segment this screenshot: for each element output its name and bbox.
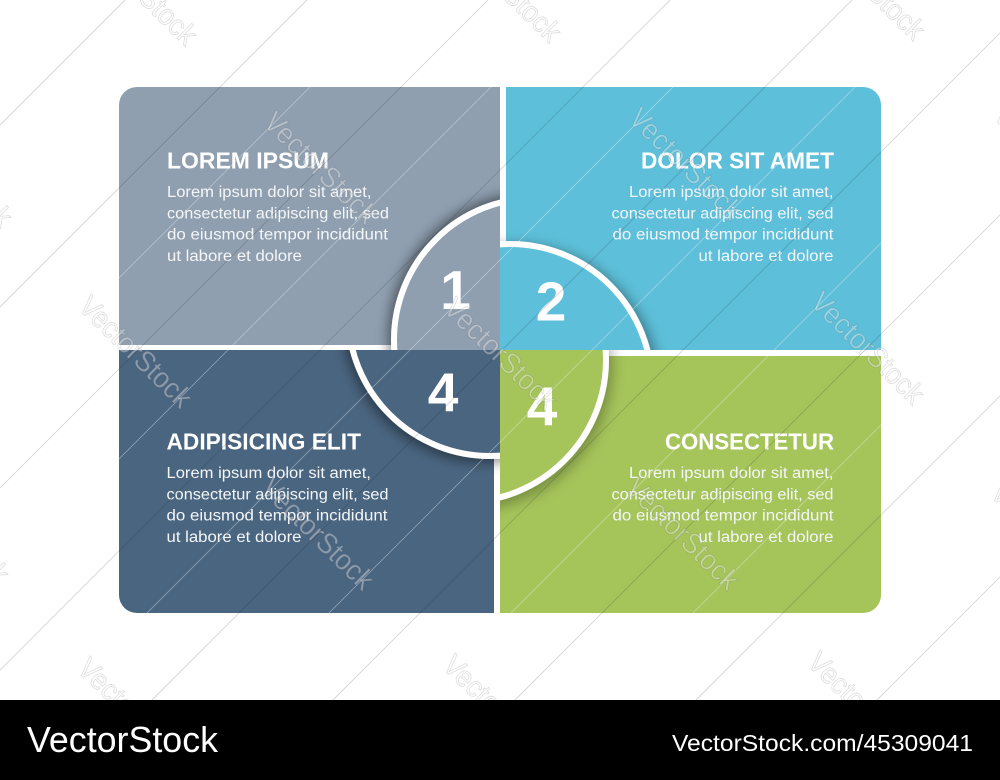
text block: adipisicing elit: ut labore et dolore <box>166 529 302 546</box>
footer bar <box>0 700 1000 780</box>
footer image id: VectorStock.com/45309041 <box>672 730 973 756</box>
text block: lorem ipsum <box>167 184 389 265</box>
text block: dolor sit amet <box>612 184 834 265</box>
footer logo text: VectorStock <box>27 719 219 760</box>
text block: adipisicing elit: Lorem ipsum dolor sit amet, <box>166 465 371 482</box>
heading: dolor sit amet: DOLOR SIT AMET <box>641 147 834 173</box>
number 4, left: 4 <box>428 361 459 423</box>
watermarks: VectorStock <box>254 472 380 597</box>
text block: consectetur: Lorem ipsum dolor sit amet, <box>629 465 834 482</box>
watermarks: VectorStock <box>804 286 930 411</box>
segment 1 arc <box>380 188 500 350</box>
text block: lorem ipsum: do eiusmod tempor incididunt <box>167 227 389 244</box>
heading: consectetur: CONSECTETUR <box>665 428 834 454</box>
panel: adipisicing elit (bottom left) <box>119 350 500 613</box>
text block: dolor sit amet: do eiusmod tempor incididunt <box>612 227 834 244</box>
segment 4 arc, right <box>500 350 619 513</box>
text block: lorem ipsum: consectetur adipiscing elit, sed <box>167 205 389 222</box>
watermarks: VectorStock <box>71 652 197 777</box>
watermarks: VectorStock <box>801 646 927 771</box>
heading: lorem ipsum: LOREM IPSUM <box>167 147 329 173</box>
watermarks: VectorStock <box>436 649 562 774</box>
panel: dolor sit amet (top right) <box>500 87 881 350</box>
watermarks: VectorStock <box>437 292 563 417</box>
text block: consectetur: ut labore et dolore <box>698 529 834 546</box>
segment 4 arc, left <box>340 350 500 471</box>
number 2: 2 <box>536 271 566 333</box>
watermarks: VectorStock <box>622 102 748 227</box>
number 1: 1 <box>440 259 471 321</box>
text block: consectetur <box>612 465 834 546</box>
panel: consectetur (bottom right) <box>500 350 881 613</box>
text block: lorem ipsum: ut labore et dolore <box>167 248 302 265</box>
text block: consectetur: do eiusmod tempor incididunt <box>612 508 834 525</box>
watermarks: VectorStock <box>257 106 383 231</box>
heading: adipisicing elit: ADIPISICING ELIT <box>166 428 361 454</box>
text block: adipisicing elit <box>166 465 388 546</box>
number 4, right: 4 <box>527 375 558 437</box>
text block: adipisicing elit: consectetur adipiscing elit, sed <box>166 486 388 503</box>
text block: consectetur: consectetur adipiscing elit, sed <box>612 486 834 503</box>
panel: lorem ipsum (top left) <box>119 87 500 350</box>
text block: dolor sit amet: Lorem ipsum dolor sit amet, <box>629 184 834 201</box>
text block: lorem ipsum: Lorem ipsum dolor sit amet, <box>167 184 372 201</box>
text block: dolor sit amet: consectetur adipiscing elit, sed <box>612 205 834 222</box>
watermarks: VectorStock <box>72 290 198 415</box>
text block: dolor sit amet: ut labore et dolore <box>698 248 834 265</box>
watermarks: VectorStock <box>619 472 745 597</box>
text block: adipisicing elit: do eiusmod tempor incididunt <box>166 508 388 525</box>
segment 2 arc <box>500 236 662 350</box>
